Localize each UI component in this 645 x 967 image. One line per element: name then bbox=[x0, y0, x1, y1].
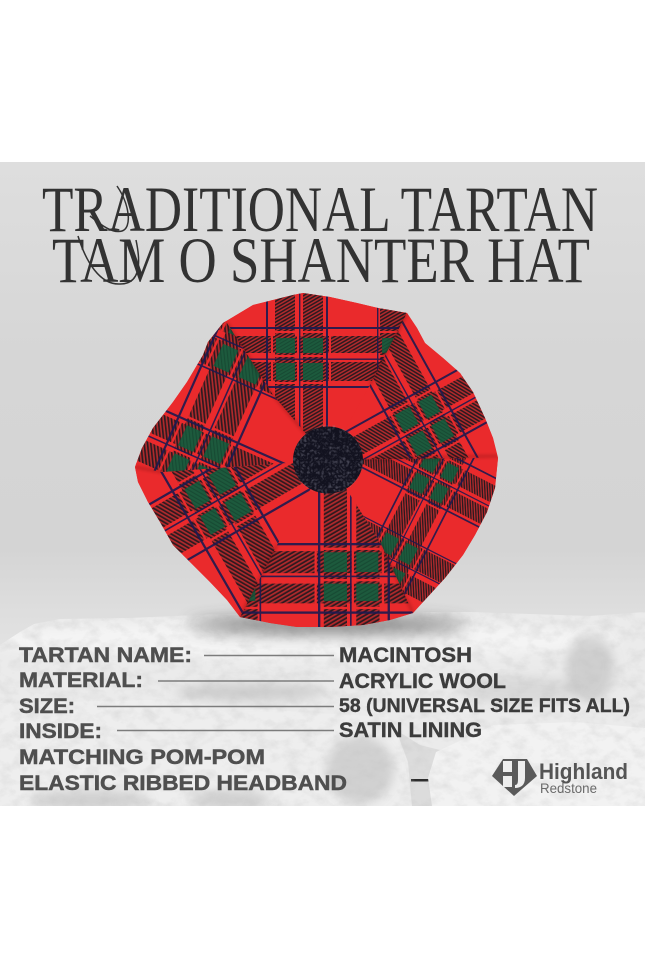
spec labels: SIZE: bbox=[19, 695, 75, 718]
spec values bbox=[339, 644, 630, 742]
spec labels: INSIDE: bbox=[19, 720, 102, 743]
logo: Highland Redstone: Redstone bbox=[540, 780, 597, 796]
panel: top wedge bbox=[226, 293, 407, 434]
title bbox=[42, 174, 598, 297]
rock platform bbox=[0, 612, 645, 810]
spec labels: MATERIAL: bbox=[19, 669, 143, 692]
gap between rocks bbox=[396, 730, 440, 806]
front right rock bbox=[428, 750, 440, 806]
spec values: ACRYLIC WOOL bbox=[339, 670, 506, 693]
hat shadow bbox=[188, 617, 468, 633]
tartan hat bbox=[135, 293, 498, 627]
spec values: SATIN LINING bbox=[339, 719, 482, 742]
leader lines bbox=[97, 656, 334, 730]
logo: Highland Redstone bbox=[492, 759, 628, 796]
panel: bottom wedge bbox=[240, 488, 413, 627]
spec labels: MATCHING POM-POM bbox=[19, 746, 265, 769]
panel: upper left wedge bbox=[135, 321, 306, 472]
spec labels: TARTAN NAME: bbox=[19, 644, 192, 667]
panel: lower right wedge bbox=[362, 457, 498, 613]
spec labels: ELASTIC RIBBED HEADBAND bbox=[19, 772, 347, 795]
logo: Highland Redstone: Highland bbox=[539, 759, 628, 784]
icon: pom-pom bbox=[293, 425, 363, 494]
front left slab bbox=[0, 700, 412, 806]
spec labels bbox=[19, 644, 347, 795]
background panel bbox=[0, 162, 645, 806]
rock shading bbox=[30, 634, 614, 810]
spec values: MACINTOSH bbox=[339, 644, 472, 667]
panel: upper right wedge bbox=[346, 313, 498, 460]
spec values: 58 (UNIVERSAL SIZE FITS ALL) bbox=[339, 695, 630, 717]
back slab light patch bbox=[14, 630, 574, 652]
fold shadows bbox=[135, 313, 498, 617]
panel: lower left wedge bbox=[135, 462, 310, 617]
